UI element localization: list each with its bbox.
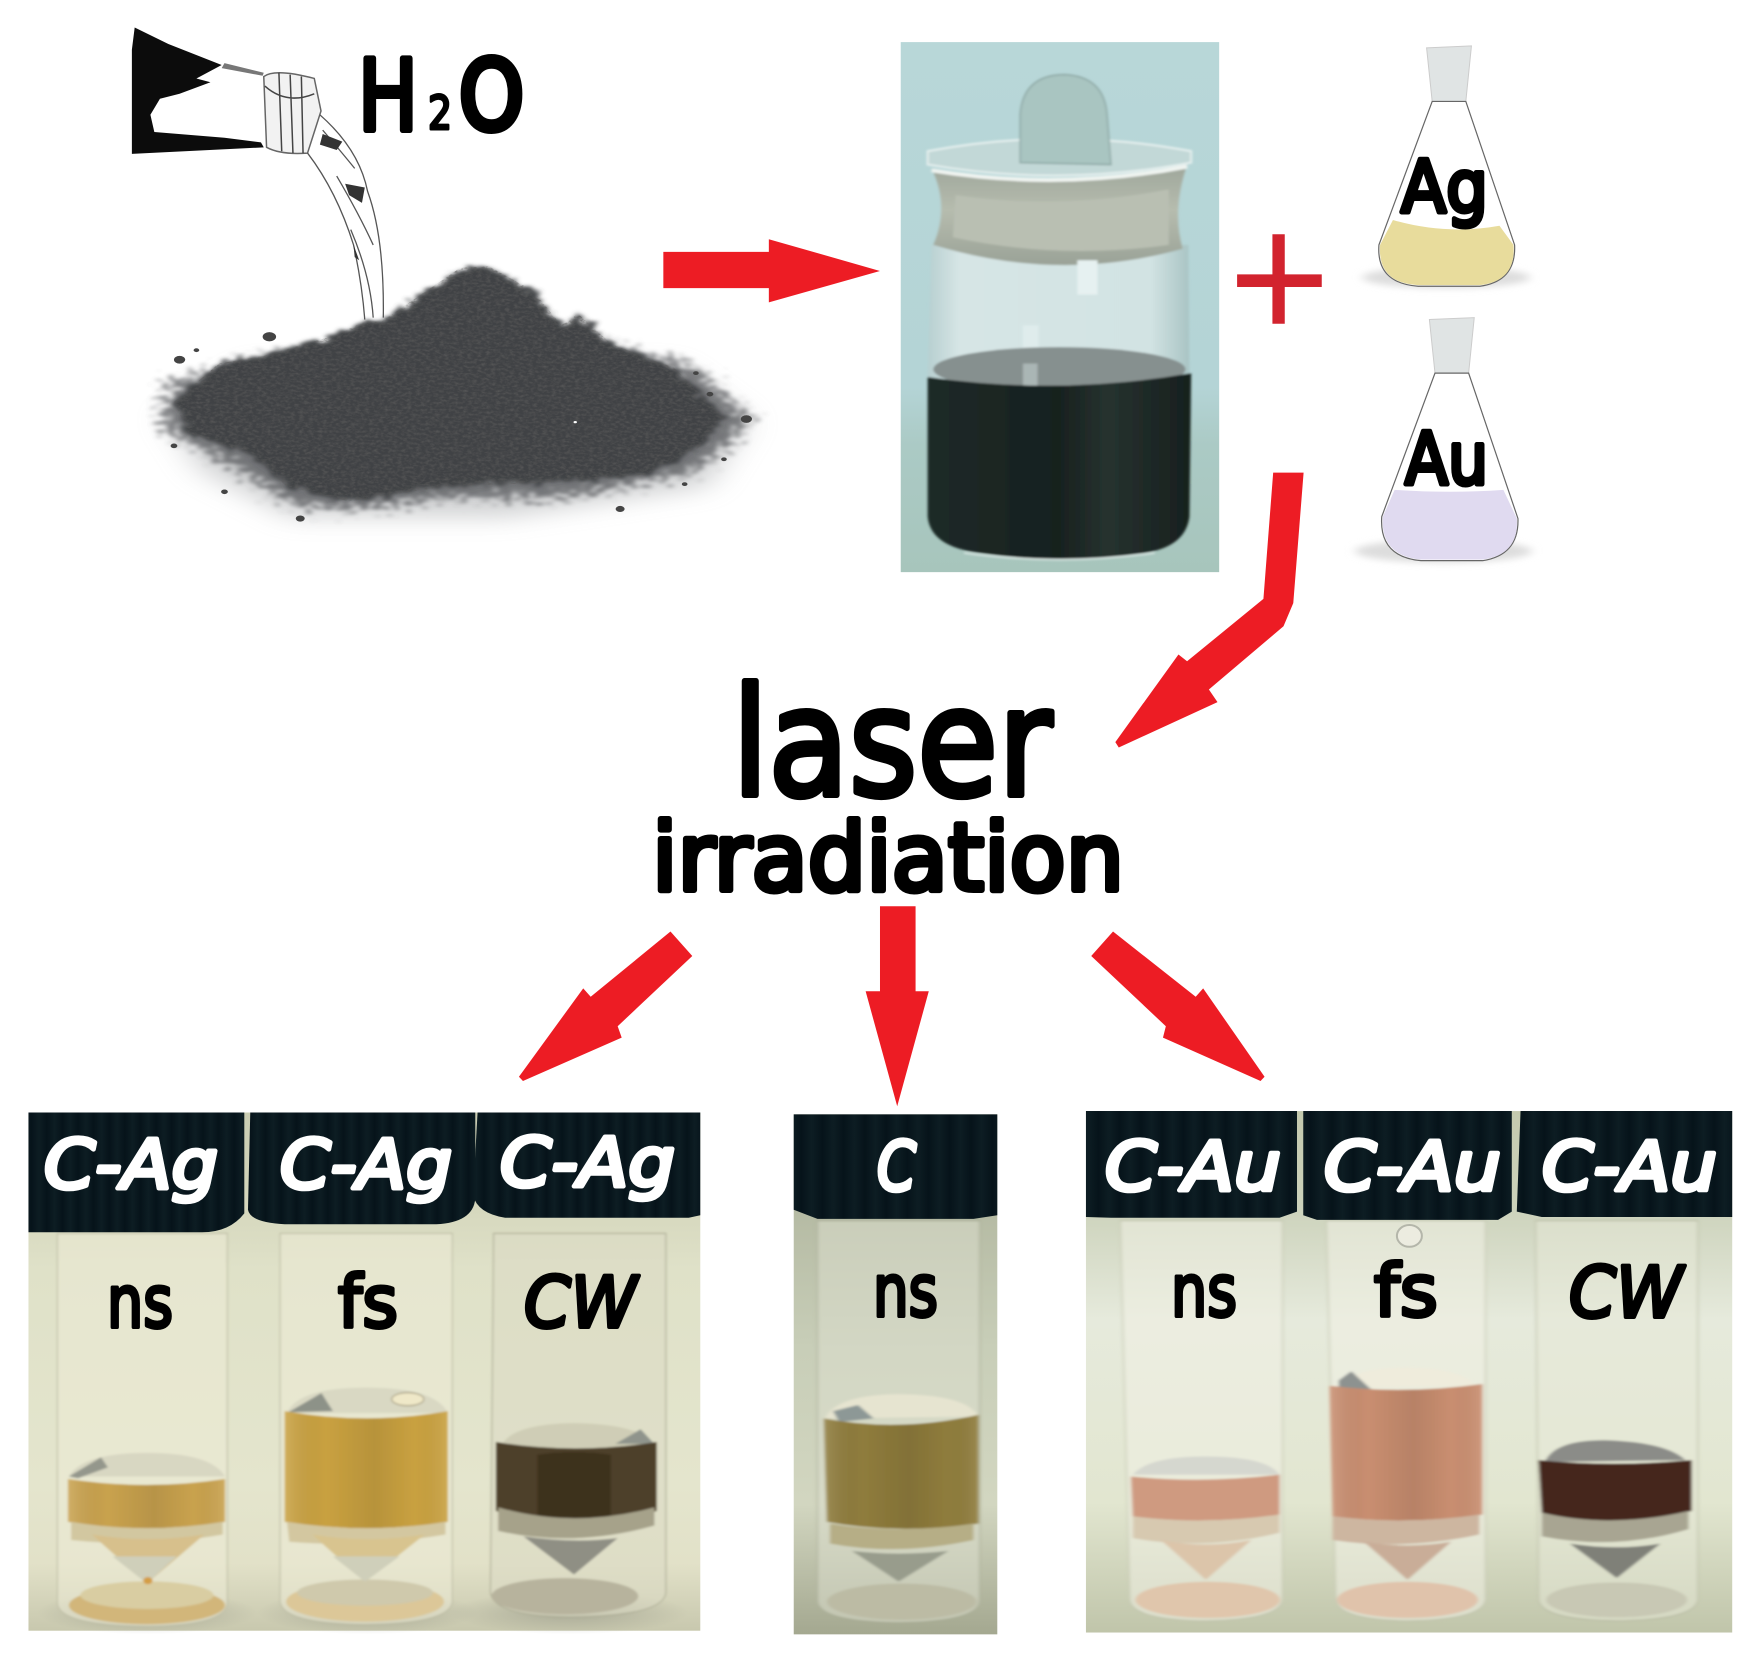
panel: C vial: [794, 1114, 997, 1634]
icon: gold flask: [1355, 318, 1532, 563]
panel: C-Au vials: [1086, 1111, 1732, 1633]
label: fs: fs: [338, 1260, 398, 1344]
arrow: to C sample: [866, 906, 929, 1106]
label: ns: ns: [107, 1260, 173, 1344]
heading: irradiation: irradiation: [652, 804, 1124, 913]
label: H2O: O: [459, 40, 524, 152]
heading: laser: laser: [732, 657, 1052, 831]
arrow: to C-Au samples: [1091, 932, 1265, 1081]
icon: water stream: [308, 115, 383, 320]
label: Au: Au: [1405, 417, 1488, 501]
arrow: reagents to laser: [1115, 473, 1304, 748]
label: C-Au ns cap: C-Au: [1105, 1128, 1281, 1207]
icon: bubble: [1397, 1225, 1422, 1247]
arrow: to C-Ag samples: [519, 932, 692, 1081]
label: C-Au CW: CW: [1569, 1252, 1686, 1334]
label: C-Ag ns cap: C-Ag: [44, 1126, 218, 1205]
vial: C-Ag fs: [280, 1233, 452, 1625]
vial: C-Ag CW: [490, 1233, 666, 1617]
label: C-Au fs cap: C-Au: [1324, 1128, 1501, 1207]
label: H2O: 2: [428, 86, 452, 140]
label: H2O: [358, 40, 524, 154]
arrow: powder to suspension: [663, 239, 880, 302]
vial caps: [28, 1112, 700, 1232]
panel: photo of jar with carbon suspension: [901, 42, 1219, 572]
label: C-Ag fs cap: C-Ag: [280, 1126, 452, 1205]
vial caps: [1086, 1111, 1732, 1220]
label: H2O: H: [358, 40, 418, 154]
vial: C ns: [817, 1221, 980, 1623]
icon: carbon powder pile: [163, 266, 752, 522]
vial: C-Ag ns: [57, 1233, 227, 1626]
label: C-Au ns: ns: [1171, 1249, 1237, 1333]
label: C-Ag CW cap: C-Ag: [500, 1124, 675, 1203]
label: C cap: C: [877, 1128, 916, 1207]
vial: C-Au ns: [1120, 1221, 1283, 1621]
label: C-Au fs: fs: [1374, 1249, 1438, 1333]
label: CW: CW: [524, 1262, 640, 1344]
panel: water poured on carbon powder: [132, 28, 752, 522]
icon: glass bottle: [132, 28, 321, 154]
icon: silver flask: [1362, 46, 1530, 288]
vial: C-Au CW: [1536, 1221, 1698, 1621]
vial: C-Au fs: [1326, 1221, 1486, 1621]
icon: plus sign: [1237, 234, 1322, 324]
label: C ns: ns: [873, 1249, 938, 1333]
panel: C-Ag vials: [28, 1112, 700, 1634]
label: Ag: Ag: [1401, 145, 1488, 229]
label: C-Au CW cap: C-Au: [1542, 1128, 1717, 1207]
vial cap: C: [794, 1114, 997, 1219]
